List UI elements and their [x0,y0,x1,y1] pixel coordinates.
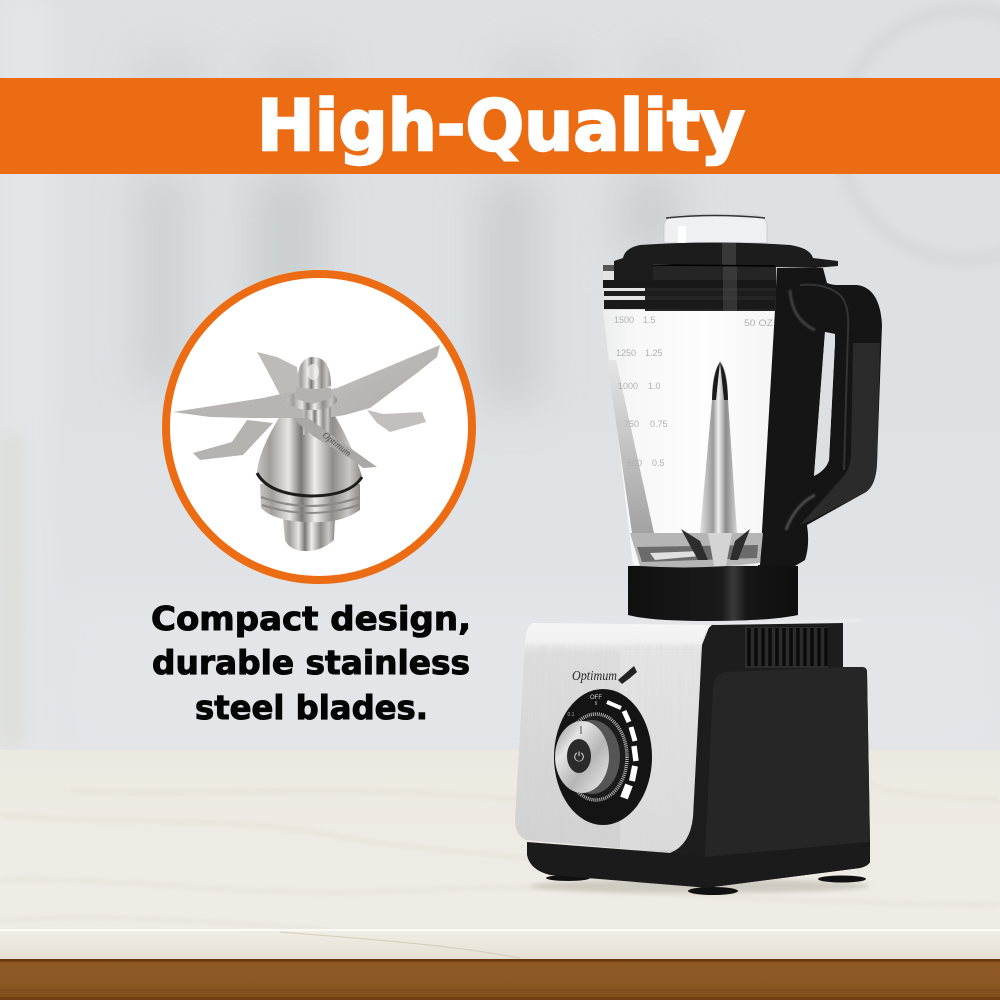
caption text: steel blades. [195,688,428,727]
blade assembly illustration: Optimum [321,430,354,459]
wooden table front [0,959,1000,1000]
dome nut [297,357,331,389]
stem [303,405,331,435]
threaded collar [260,484,360,522]
lower small blade right [367,410,426,432]
clear lid cap [664,215,767,243]
ground shadow [530,879,870,893]
background: blurred kitchen wall [0,0,1000,760]
volume markings: 1.25 [645,348,663,358]
silver knob [555,721,609,793]
volume markings: 1000 [618,381,638,391]
collar under jar [628,566,798,621]
feet [546,875,866,895]
caption text: durable stainless [152,643,470,682]
title: High-Quality [257,85,745,167]
blade arm front [292,418,377,468]
speed scale [607,702,636,798]
lower small blade left [193,420,273,460]
blade arm upper right [300,345,440,422]
blade arm left [173,392,310,418]
small blades at the floor [681,529,750,560]
circular blade detail [166,274,472,580]
hex nut [296,384,332,404]
power button: ⏻ [574,750,584,765]
brand logo [572,666,637,684]
glass jar body [603,310,775,567]
left inner blade reflection [607,360,654,533]
blender product [510,215,882,895]
vent grille [745,627,828,668]
volume markings: 0.5 [652,458,665,468]
blade assembly illustration [173,345,440,551]
blade arm top left [257,352,300,395]
volume markings: 1.5 [643,315,656,325]
knurled ring [565,714,627,800]
knob skirt [564,720,620,794]
caption text: Compact design, [151,599,471,638]
control dial [554,689,652,825]
volume markings: 50 OZ [744,318,774,328]
handle [758,268,882,566]
volume markings: 0.75 [650,419,668,429]
jar neck bands [603,265,777,311]
cone hub [257,416,362,497]
volume markings: 1250 [616,348,636,358]
volume markings: 1500 [614,315,634,325]
brushed steel front plate [510,623,712,855]
dial labels: OFF [590,695,602,701]
black lid [614,242,838,281]
countertop: marble [0,750,1000,959]
caption text [151,599,471,727]
tall center blade reflection [700,360,737,533]
top deck sliver [710,619,866,625]
washer [287,390,337,410]
brand logo: Optimum [572,669,617,684]
jar floor [630,533,763,567]
control dial: 0.1 [568,712,575,718]
volume markings: 750 [624,419,639,429]
volume markings: 1.0 [648,381,661,391]
volume markings: 500 [627,458,642,468]
orange title banner [0,78,1000,174]
o-ring [257,473,362,496]
volume markings [614,315,774,468]
motor base right body [660,619,870,888]
splined shaft [283,518,335,551]
motor base bottom band [527,842,870,888]
